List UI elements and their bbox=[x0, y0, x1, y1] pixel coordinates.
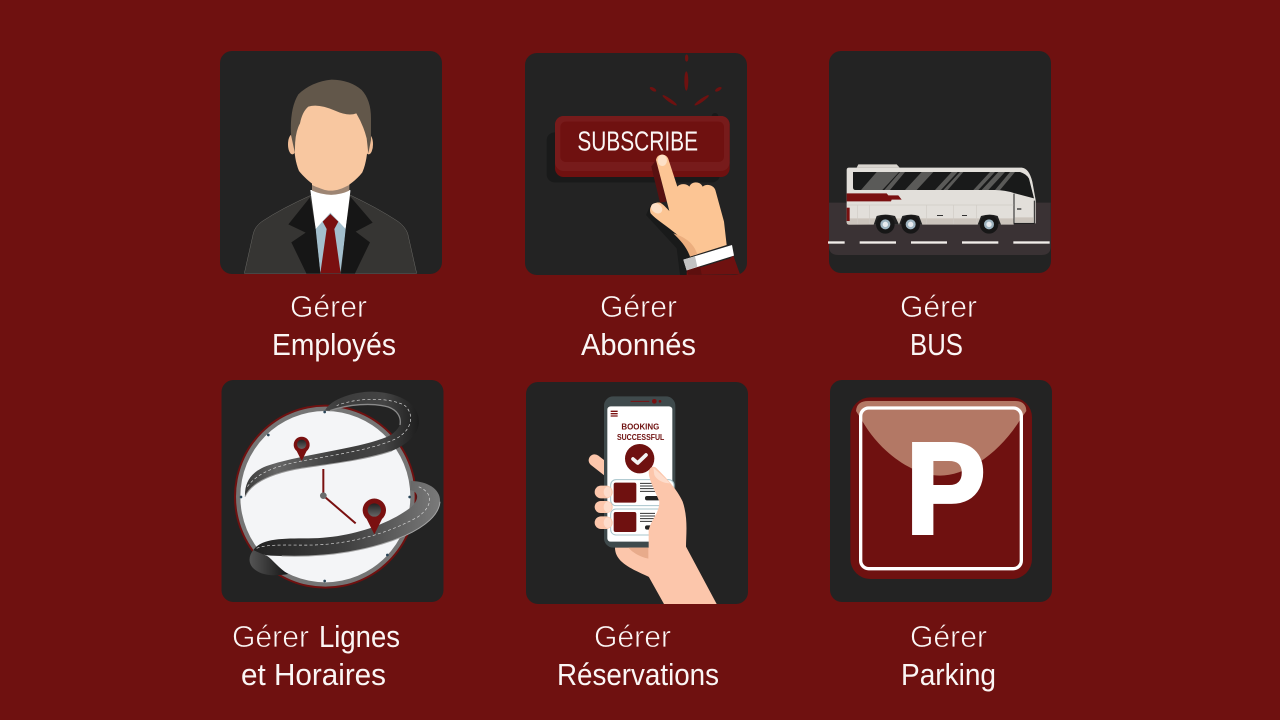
heading: gérer réservations bbox=[557, 619, 719, 692]
panel: abonnés bbox=[525, 53, 747, 275]
heading: gérer employés bbox=[272, 289, 396, 362]
heading: gérer abonnés: Abonnés bbox=[581, 327, 696, 362]
icon: clock with winding road bbox=[234, 392, 440, 589]
heading: gérer parking bbox=[901, 619, 996, 692]
panel: parking bbox=[830, 380, 1052, 602]
heading: gérer réservations: Réservations bbox=[557, 657, 719, 692]
heading: gérer lignes et horaires: et Horaires bbox=[241, 657, 386, 692]
icon: subscribe button with hand bbox=[547, 54, 740, 275]
icon: bus on road bbox=[828, 164, 1051, 255]
heading: gérer employés: Employés bbox=[272, 327, 396, 362]
icon: subscribe button with hand: SUBSCRIBE bbox=[577, 126, 698, 157]
heading: gérer parking: Gérer bbox=[910, 619, 987, 654]
heading: gérer lignes et horaires: Lignes bbox=[319, 619, 400, 654]
icon: businessman bbox=[244, 80, 417, 273]
road: lower ribbon bbox=[250, 481, 440, 575]
heading: gérer réservations: Gérer bbox=[594, 619, 671, 654]
icon: phone in hand: SUCCESSFUL bbox=[617, 433, 664, 442]
panel: réservations bbox=[526, 382, 748, 604]
heading: gérer lignes et horaires bbox=[232, 619, 400, 692]
heading: gérer bus bbox=[900, 289, 977, 362]
panel: employés bbox=[220, 51, 442, 274]
icon: phone in hand bbox=[595, 396, 717, 604]
icon: parking sign bbox=[850, 397, 1032, 579]
heading: gérer parking: Parking bbox=[901, 657, 996, 692]
heading: gérer employés: Gérer bbox=[290, 289, 367, 324]
heading: gérer abonnés: Gérer bbox=[600, 289, 677, 324]
heading: gérer abonnés bbox=[581, 289, 696, 362]
panel: lignes et horaires bbox=[222, 380, 444, 602]
heading: gérer bus: BUS bbox=[910, 327, 963, 362]
heading: gérer lignes et horaires: Gérer bbox=[232, 619, 309, 654]
icon: phone in hand: BOOKING bbox=[621, 423, 659, 432]
icon: parking sign: P bbox=[906, 417, 985, 561]
road: upper ribbon bbox=[245, 392, 419, 497]
heading: gérer bus: Gérer bbox=[900, 289, 977, 324]
panel: bus bbox=[828, 51, 1051, 273]
